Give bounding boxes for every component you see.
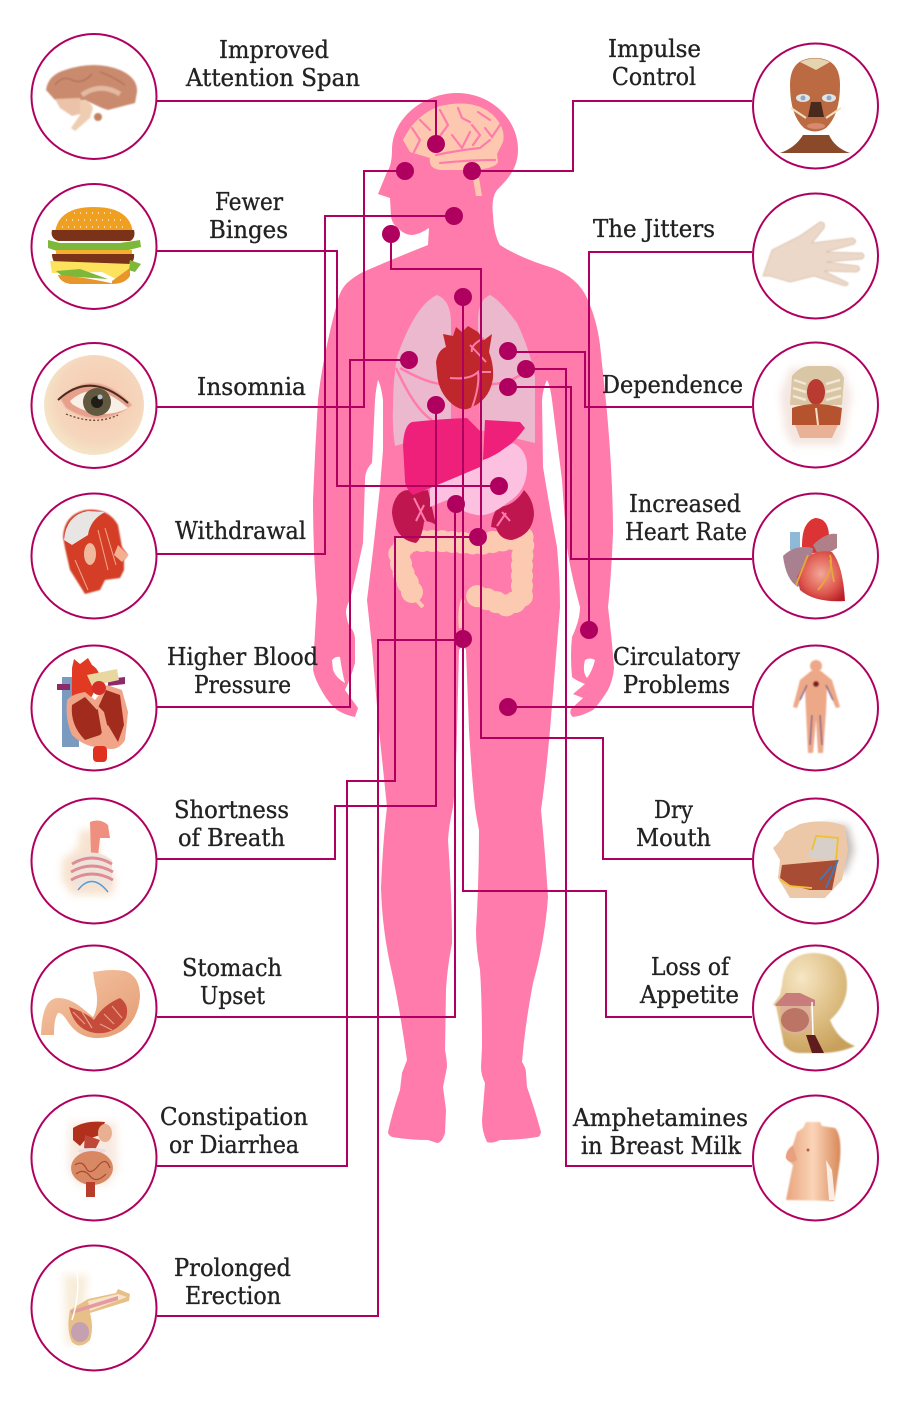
callout: Amphetamines in Breast Milk xyxy=(517,360,878,1220)
label: Dry xyxy=(654,796,693,824)
label: Upset xyxy=(200,982,265,1010)
label: Improved xyxy=(219,36,329,64)
icon: torso organs xyxy=(780,366,852,445)
label xyxy=(167,643,318,699)
connector xyxy=(157,537,478,1166)
dot xyxy=(396,162,414,180)
dot xyxy=(499,698,517,716)
icon: circulatory figure xyxy=(793,660,840,753)
dot xyxy=(517,360,535,378)
label xyxy=(572,1104,748,1160)
label: Mouth xyxy=(636,824,711,852)
brain folds xyxy=(412,108,500,163)
label: Withdrawal xyxy=(175,517,306,545)
lungs xyxy=(393,295,535,446)
label: Erection xyxy=(185,1282,281,1310)
body silhouette xyxy=(313,93,614,1143)
dot xyxy=(427,396,445,414)
connector xyxy=(508,352,752,407)
label: in Breast Milk xyxy=(581,1132,741,1160)
liver xyxy=(403,418,525,495)
dot xyxy=(499,378,517,396)
icon: heart cross-section xyxy=(57,658,128,762)
label: Loss of xyxy=(651,953,731,981)
label xyxy=(608,35,701,91)
label: Prolonged xyxy=(174,1254,291,1282)
dot xyxy=(490,477,508,495)
label: Dependence xyxy=(602,371,743,399)
kidney vessels xyxy=(414,498,510,526)
dot xyxy=(454,630,472,648)
ring xyxy=(32,343,156,468)
ring xyxy=(753,798,878,924)
ring xyxy=(32,946,156,1070)
icon: burger xyxy=(48,207,141,284)
label: Fewer xyxy=(215,188,283,216)
ring xyxy=(753,194,878,318)
body figure with organs xyxy=(313,93,614,1143)
connector xyxy=(589,252,752,630)
ring xyxy=(32,646,156,770)
icon: male anatomy xyxy=(64,1272,130,1346)
stomach xyxy=(430,443,527,515)
label: The Jitters xyxy=(593,215,715,243)
ring xyxy=(753,494,878,618)
dot xyxy=(469,528,487,546)
ring xyxy=(32,798,156,924)
connector xyxy=(157,251,499,486)
connector xyxy=(508,706,752,708)
label xyxy=(639,953,739,1009)
ring xyxy=(753,1096,878,1220)
ring xyxy=(753,342,878,468)
callout: Constipation or Diarrhea xyxy=(32,528,487,1220)
dot xyxy=(445,207,463,225)
callout: Increased Heart Rate xyxy=(499,378,878,618)
connector xyxy=(526,369,752,1166)
icon: female torso xyxy=(786,1122,840,1201)
ring xyxy=(753,646,878,770)
callout: Higher Blood Pressure xyxy=(32,351,418,770)
label: Amphetamines xyxy=(572,1104,748,1132)
callout: Loss of Appetite xyxy=(454,288,878,1070)
label: Heart Rate xyxy=(625,518,747,546)
label: Problems xyxy=(623,671,730,699)
kidneys xyxy=(392,490,534,543)
ring xyxy=(32,34,156,159)
label: Increased xyxy=(629,490,741,518)
large intestine xyxy=(399,537,524,628)
icon: digestive organs xyxy=(68,1122,118,1197)
callout: Circulatory Problems xyxy=(499,643,878,770)
ring xyxy=(32,494,156,618)
ring xyxy=(32,184,156,309)
ring xyxy=(32,1246,156,1370)
callout: Improved Attention Span xyxy=(32,34,445,159)
dot xyxy=(463,162,481,180)
dot xyxy=(427,135,445,153)
label xyxy=(613,643,740,699)
callout: Dependence xyxy=(499,342,878,468)
dot xyxy=(499,342,517,360)
label: Shortness xyxy=(174,796,289,824)
icon: stomach xyxy=(41,970,140,1038)
label xyxy=(625,490,747,546)
icon: brain cross-section xyxy=(46,65,137,131)
dot xyxy=(580,621,598,639)
callout: Insomnia xyxy=(32,162,414,468)
label: Control xyxy=(612,63,696,91)
icon: anatomical heart xyxy=(783,518,845,601)
label: Attention Span xyxy=(185,64,360,92)
connector xyxy=(157,405,436,859)
icon: hand xyxy=(763,222,864,286)
label: Binges xyxy=(209,216,288,244)
label xyxy=(185,36,360,92)
ring xyxy=(753,44,878,168)
connector xyxy=(157,101,436,144)
icon: red eye xyxy=(44,355,144,455)
hand slits xyxy=(332,657,595,683)
heart vessels xyxy=(450,338,491,408)
callout: Stomach Upset xyxy=(32,495,465,1070)
icon: head muscles profile xyxy=(63,510,128,594)
connector xyxy=(157,171,405,407)
label: of Breath xyxy=(178,824,285,852)
label xyxy=(174,1254,291,1310)
connector xyxy=(157,640,463,1316)
dot xyxy=(382,225,400,243)
lung diaphragm lines xyxy=(396,368,530,420)
label: Appetite xyxy=(639,981,739,1009)
label xyxy=(160,1103,308,1159)
ring xyxy=(32,1096,156,1220)
label: Pressure xyxy=(194,671,291,699)
callout: Prolonged Erection xyxy=(32,630,472,1370)
connector xyxy=(472,101,752,171)
icon: chest and airway xyxy=(62,821,116,895)
label xyxy=(182,954,282,1010)
label: Impulse xyxy=(608,35,701,63)
label: Stomach xyxy=(182,954,282,982)
heart xyxy=(436,326,493,409)
ring xyxy=(753,946,878,1070)
callout: Shortness of Breath xyxy=(32,396,445,924)
dot xyxy=(400,351,418,369)
connector xyxy=(157,504,455,1017)
label: Circulatory xyxy=(613,643,740,671)
callout: Fewer Binges xyxy=(32,184,508,495)
label: Higher Blood xyxy=(167,643,318,671)
callout: Impulse Control xyxy=(463,35,878,180)
label: Insomnia xyxy=(197,373,306,401)
label xyxy=(209,188,288,244)
dot xyxy=(454,288,472,306)
brain xyxy=(403,103,504,196)
callout: The Jitters xyxy=(580,194,878,639)
callout: Dry Mouth xyxy=(382,225,878,924)
connector xyxy=(463,297,752,1017)
dot xyxy=(447,495,465,513)
label: Constipation xyxy=(160,1103,308,1131)
label xyxy=(174,796,289,852)
icon: head cross-section xyxy=(773,953,855,1053)
connector xyxy=(157,216,454,554)
icon: facial muscles front xyxy=(780,58,850,153)
label: or Diarrhea xyxy=(169,1131,299,1159)
connector xyxy=(508,387,752,559)
callout: Withdrawal xyxy=(32,207,463,618)
label xyxy=(636,796,711,852)
connector xyxy=(157,360,409,707)
icon: face dissection xyxy=(773,821,854,898)
connector xyxy=(391,234,752,859)
